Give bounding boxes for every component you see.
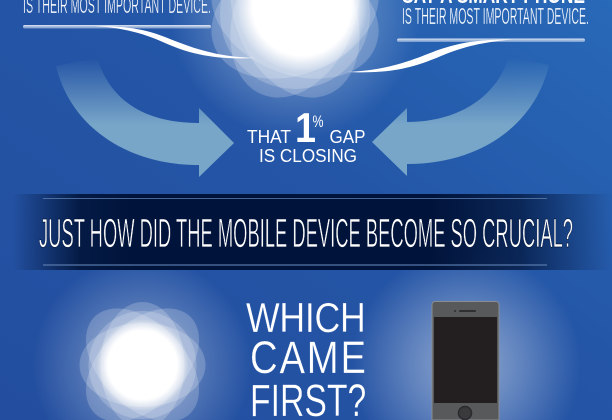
heading: which came first [246, 295, 366, 420]
callout: gap closing: GAP [330, 127, 366, 147]
banner [0, 194, 612, 270]
right rule [397, 38, 585, 42]
icon: top light flower [212, 0, 378, 98]
callout: gap closing: IS CLOSING [259, 146, 357, 166]
right swoosh [347, 40, 512, 72]
arrow: right [372, 57, 549, 176]
heading: which came first: WHICH [246, 295, 366, 342]
glow: bottom flower [32, 255, 252, 420]
left rule [23, 25, 211, 28]
heading: which came first: CAME [250, 332, 366, 383]
left swoosh [95, 26, 256, 58]
glow: phone [351, 250, 581, 420]
arrow: left [56, 58, 234, 177]
callout: gap closing: % [312, 112, 324, 131]
glow: top flower [170, 0, 420, 140]
callout: gap closing [247, 104, 366, 166]
icon: smartphone [432, 302, 499, 420]
callout: gap closing: THAT [247, 127, 291, 147]
callout: gap closing: 1 [295, 104, 316, 151]
icon: bottom light flower [80, 302, 206, 420]
